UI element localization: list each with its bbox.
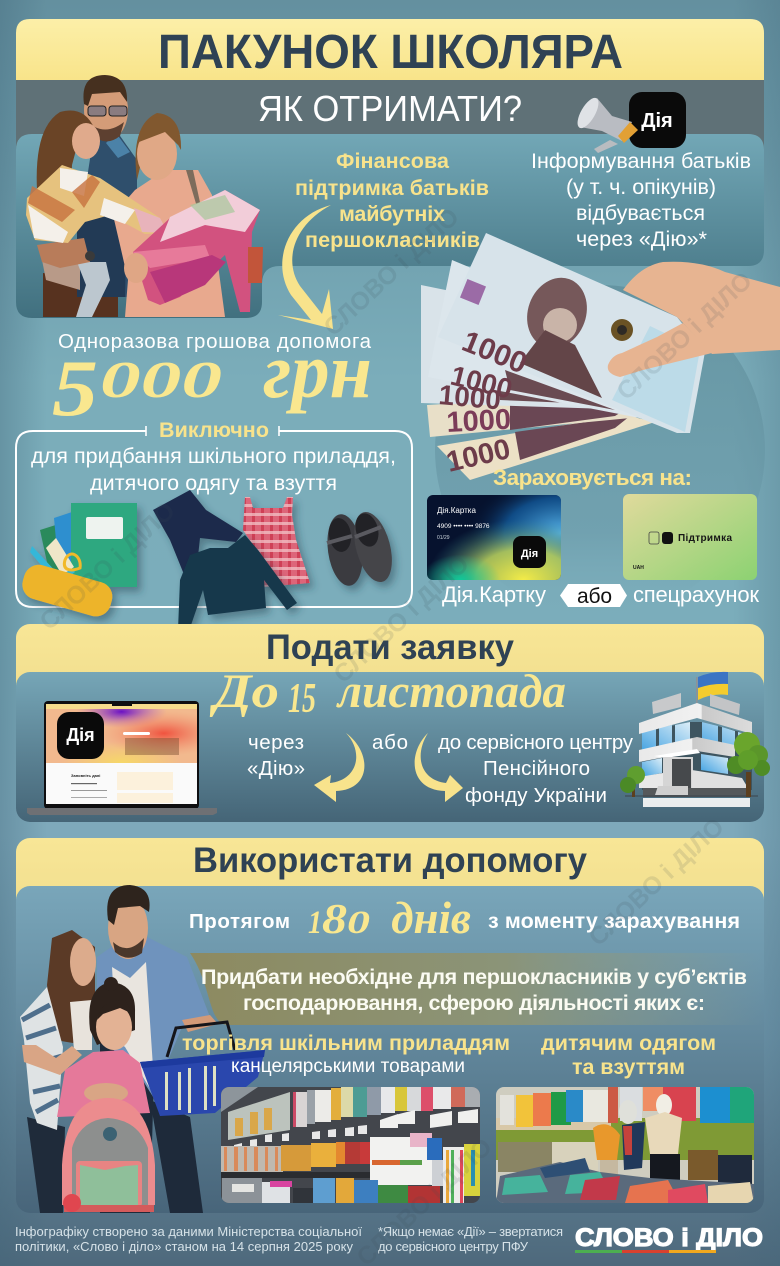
caption: Diia card or account: або [577,585,612,608]
card: Diia card: 4909 •••• •••• 9876 [437,523,490,530]
section banner: use aid [16,838,764,930]
photo: children's clothes store [496,1087,754,1203]
card: Diia card: Дія.Картка [437,506,476,515]
logo: Slovo i Dilo: СЛОВО і ДІЛО [575,1224,763,1252]
section banner: use aid: Використати допомогу [193,841,588,880]
amount: 5000 UAH: грн [244,327,372,414]
watermarks: СЛОВО і ДІЛО [318,203,465,342]
heading: credited to: Зараховується на: [493,465,692,490]
icon: megaphone and Diia tile: Дія [641,110,673,132]
text: via Diia: через [248,731,304,754]
card: Diia card: Дія [521,548,538,560]
arrow: down to amount [278,205,333,329]
illustration: notebooks and pencil case [19,503,137,620]
amount: 5000 UAH: 5 [52,345,98,433]
text: to pension fund: Пенсійного [483,757,590,780]
text: or: або [372,731,408,754]
heading: financial support: Фінансова [336,149,450,173]
card: special account: UAH [633,565,644,571]
text: within 180 days: з моменту зарахування [488,909,740,933]
panel: use aid [16,886,764,1213]
panel: exclusively for purchases: для придбання шкільного приладдя, [31,444,396,468]
footer: footnote [378,1224,563,1254]
photo: stationery store shelves [221,1087,480,1203]
panel: exclusively for purchases: Виключно [159,418,269,442]
heading: financial support: майбутніх [339,202,445,226]
illustration: children's clothes [153,490,310,630]
text: children's clothing: та взуттям [572,1055,685,1079]
icon: shopping basket [140,1022,265,1116]
watermarks [34,203,758,1266]
text: informing parents: відбувається [576,201,705,225]
image: laptop with Diia portal [27,701,217,815]
subtitle band [16,80,764,150]
text: purchase conditions: Придбати необхідне для першокласників у суб’єктів [201,965,747,989]
photo: family with backpack [26,75,263,317]
photo: family with basket [20,885,218,1213]
footer: footnote: *Якщо немає «Дії» – звертатися [378,1224,563,1239]
image: banknotes in hand: 1000 [437,379,502,415]
text: purchase conditions [201,965,747,1015]
text: within 180 days: 1 [308,905,322,941]
subtitle band: ЯК ОТРИМАТИ? [258,88,522,129]
text: informing parents [531,149,751,251]
panel: how to get [16,134,764,318]
caption: Diia card or account: Дія.Картку [442,582,546,607]
card: Diia card: 01/29 [437,535,450,541]
card: special account: Підтримка [678,533,732,544]
heading: financial support [295,149,489,252]
footer: source note: Інфографіку створено за даними Міністерства соціальної [15,1224,362,1239]
background circle behind money [435,285,764,548]
watermarks: СЛОВО і ДІЛО [34,497,181,636]
text: school supplies trade: канцелярськими товарами [231,1056,465,1077]
watermarks: СЛОВО і ДІЛО [583,813,730,952]
text: via Diia [247,731,305,780]
heading: financial support: підтримка батьків [295,176,489,200]
text: within 180 days: 0 [347,905,370,941]
image: laptop with Diia portal: Заповніть дані [71,773,100,778]
text: to pension fund: фонду України [465,784,607,807]
image: banknotes in hand: 1000 [448,360,515,405]
footer: footnote: до сервісного центру ПФУ [378,1239,529,1254]
caption: Diia card or account: спецрахунок [633,582,759,607]
text: school supplies trade: торгівля шкільним приладдям [182,1031,510,1055]
watermarks: СЛОВО і ДІЛО [611,267,758,406]
section banner: apply [16,624,764,714]
title banner [16,19,764,80]
panel: exclusively for purchases: дитячого одягу та взуття [90,471,337,495]
text: informing parents: (у т. ч. опікунів) [566,175,716,199]
arrow: to service centre [415,733,463,802]
text: school supplies trade [182,1031,510,1077]
illustration: shoes [323,508,399,588]
caption: Diia card or account [442,582,759,608]
image: banknotes in hand: 1000 [443,433,513,479]
text: one-time aid: Одноразова грошова допомога [58,330,372,353]
title banner: ПАКУНОК ШКОЛЯРА [158,26,623,79]
text: within 180 days: Протягом [189,910,290,933]
text: within 180 days [189,892,740,943]
image: banknotes in hand: 1000 [457,325,532,380]
image: banknotes in hand [421,233,780,480]
footer: source note: політики, «Слово і діло» станом на 14 серпня 2025 року [15,1239,354,1254]
text: to pension fund [438,731,634,807]
text: within 180 days: 8 [322,897,347,943]
deadline: until November 15: 15 [281,676,316,722]
panel: exclusively for purchases [16,418,412,607]
text: children's clothing: дитячим одягом [541,1031,716,1055]
card: special account [623,494,757,580]
image: laptop with Diia portal: Дія [66,725,95,745]
text: informing parents: Інформування батьків [531,149,751,173]
deadline: until November 15: До [209,665,279,718]
text: purchase conditions: господарювання, сферою діяльності яких є: [243,991,705,1015]
text: informing parents: через «Дію»* [576,227,708,251]
amount: 5000 UAH: 000 [100,352,222,409]
text: via Diia: «Дію» [247,757,305,780]
illustration: pension fund building [620,672,770,807]
text: to pension fund: до сервісного центру [438,731,634,754]
band: purchase conditions [190,953,764,1025]
heading: financial support: першокласників [305,228,480,252]
card: Diia card [427,495,561,580]
section banner: apply: Подати заявку [266,628,515,667]
deadline: until November 15: листопада [326,665,566,718]
icon: megaphone and Diia tile [573,92,686,153]
panel: apply [16,672,764,822]
arrow: via Diia [314,733,364,802]
text: children's clothing [541,1031,716,1079]
text: within 180 days: днів [380,892,471,943]
image: banknotes in hand: 1000 [446,404,512,439]
footer: source note [15,1224,362,1254]
watermarks: СЛОВО і ДІЛО [328,550,475,689]
